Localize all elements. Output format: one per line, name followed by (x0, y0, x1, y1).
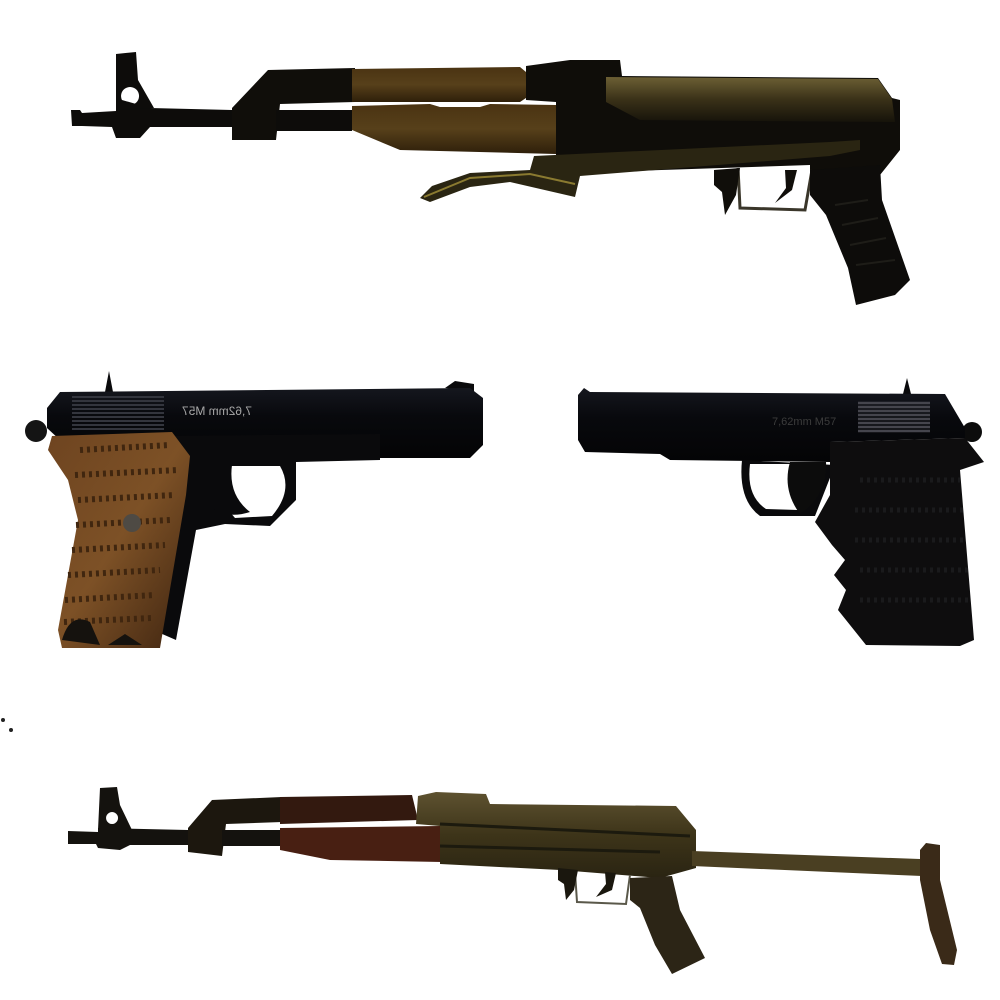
upper handguard (352, 67, 526, 102)
slide serrations (858, 403, 930, 431)
pistol grip (630, 876, 705, 974)
lower handguard (280, 826, 442, 862)
rifle: top, folded stock (71, 52, 910, 305)
extended stock arm (692, 851, 922, 876)
upper handguard (280, 795, 418, 824)
gas block (188, 797, 282, 856)
receiver cover (606, 77, 895, 122)
trigger guard opening (217, 466, 285, 518)
muzzle and barrel (71, 100, 232, 138)
pistol: right, rubber grip (578, 378, 984, 646)
trigger and magazine catch (558, 868, 616, 900)
trigger guard opening (749, 464, 798, 510)
frame (130, 434, 380, 640)
trigger (205, 465, 250, 515)
rubber grip (815, 438, 984, 646)
slide marking: 7,62mm M57 (182, 404, 252, 418)
pistol: left, wood grip (25, 371, 483, 648)
slide (47, 388, 483, 458)
trigger and magazine catch (714, 168, 797, 215)
hammer (25, 420, 47, 442)
hammer (962, 422, 982, 442)
slide (578, 388, 965, 462)
folding stock arm (420, 140, 860, 202)
butt plate (920, 843, 957, 965)
trigger guard (741, 460, 835, 516)
grip screw (123, 514, 141, 532)
lower handguard (352, 104, 556, 154)
slide serrations (72, 397, 164, 429)
pistol grip (810, 165, 910, 305)
rear sight (903, 378, 911, 394)
trigger guard (738, 168, 812, 210)
front sight (98, 787, 132, 830)
grip checkering (64, 445, 178, 622)
receiver (416, 792, 696, 878)
rear sight and front sight (105, 371, 474, 392)
trigger guard (575, 872, 630, 904)
wooden grip (48, 432, 190, 648)
muzzle and barrel (68, 828, 188, 850)
receiver (526, 60, 900, 175)
trigger (788, 462, 826, 514)
rifle: bottom, extended stock (68, 787, 957, 974)
slide marking: 7,62mm M57 (772, 416, 836, 428)
front sight (116, 52, 154, 110)
gas block (232, 68, 355, 140)
magazine base (62, 619, 142, 645)
specks at left edge (1, 718, 13, 732)
